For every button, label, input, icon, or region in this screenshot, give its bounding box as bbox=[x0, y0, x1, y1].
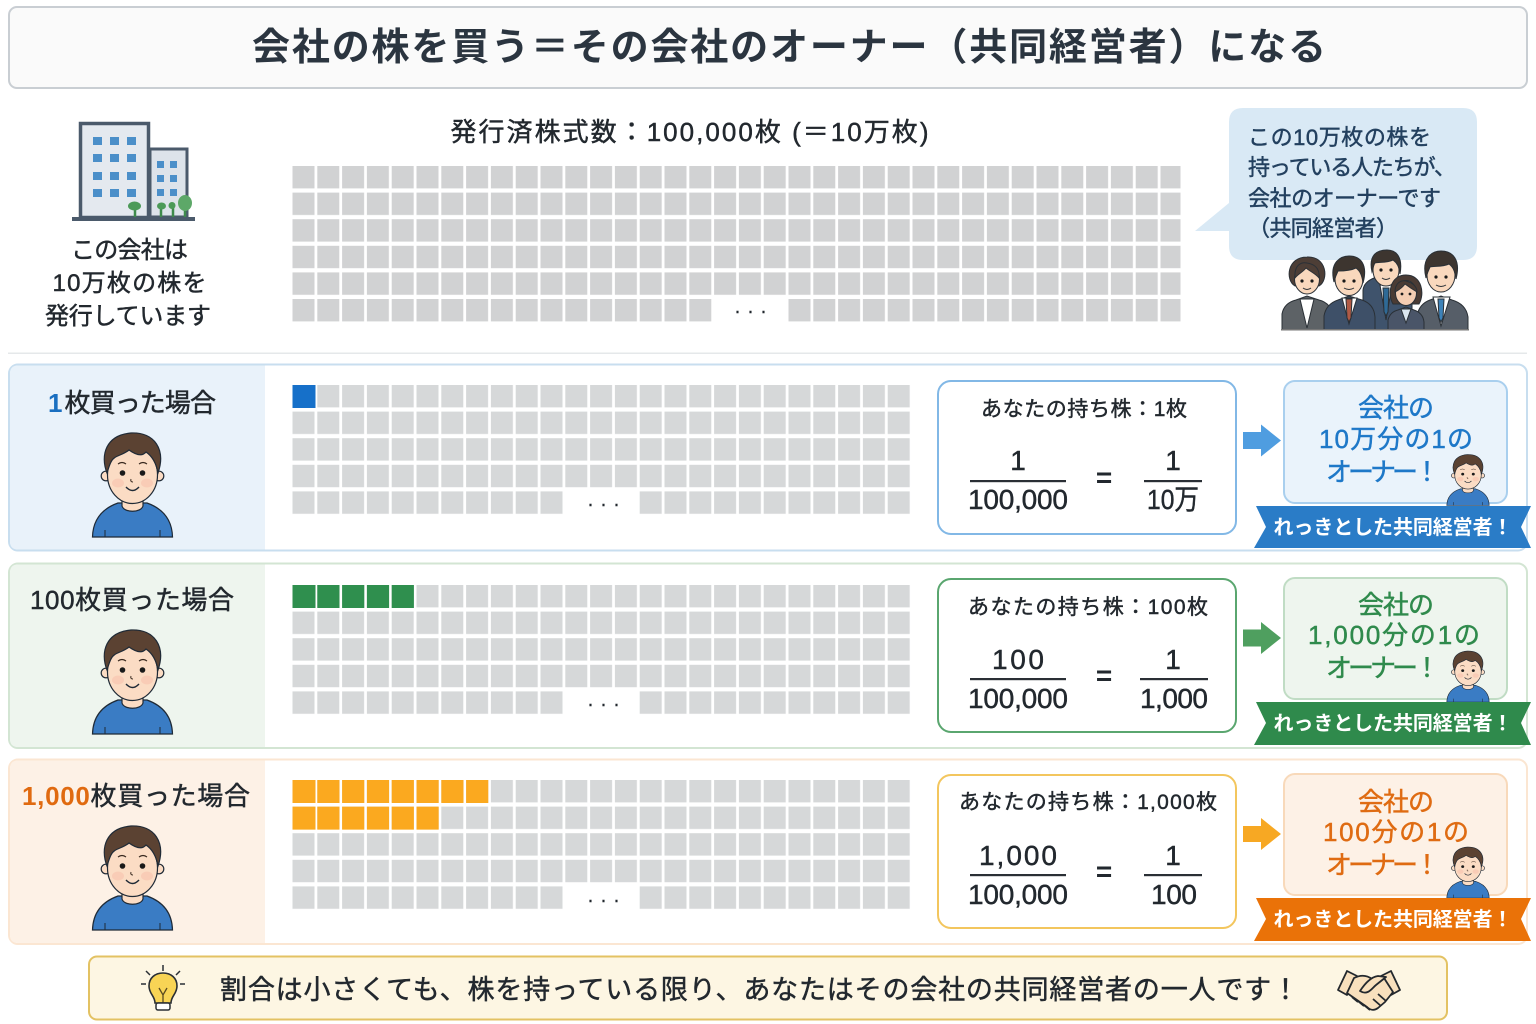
card: holdings fraction: あなたの持ち株：100枚 bbox=[968, 596, 1208, 619]
chart: 1 share of grid bbox=[292, 385, 912, 517]
chart: 1 share of grid: · · · bbox=[588, 494, 620, 514]
callout text: 会社のオーナーです bbox=[1248, 186, 1441, 211]
icon: group of co-owners bbox=[1281, 250, 1469, 330]
icon: office buildings bbox=[72, 124, 195, 221]
company description text bbox=[45, 237, 211, 330]
ribbon bbox=[1254, 898, 1531, 941]
panel: buying 100 shares bbox=[9, 564, 1531, 748]
ribbon bbox=[1254, 702, 1531, 745]
row background bbox=[9, 564, 1527, 748]
callout text: （共同経営者） bbox=[1248, 216, 1398, 241]
result: ownership callout: 会社の bbox=[1358, 590, 1434, 620]
card: holdings fraction: 1,000 bbox=[1140, 683, 1208, 714]
chart: share grid bbox=[292, 166, 1180, 325]
chart: 1,000 shares of grid bbox=[292, 780, 912, 912]
callout text bbox=[1248, 125, 1456, 241]
card: holdings fraction bbox=[938, 381, 1236, 534]
card: holdings fraction: 100 bbox=[992, 644, 1044, 675]
result: ownership callout: 100分の1の bbox=[1323, 817, 1469, 847]
ribbon bbox=[1254, 506, 1531, 548]
row background bbox=[9, 364, 1527, 550]
result: ownership callout: 会社の bbox=[1358, 393, 1434, 423]
panel: total issued shares bbox=[292, 117, 1180, 325]
heading: 100 shares: 100枚買った場合 bbox=[30, 585, 234, 615]
heading: 1 share: 1枚買った場合 bbox=[48, 388, 216, 418]
ribbon: れっきとした共同経営者！ bbox=[1274, 908, 1512, 931]
result: ownership callout: オーナー！ bbox=[1326, 457, 1440, 487]
icon: investor person bbox=[92, 433, 172, 537]
company description text: 発行しています bbox=[45, 303, 211, 330]
card: holdings fraction: 1 bbox=[1165, 840, 1181, 871]
ribbon: れっきとした共同経営者！ bbox=[1274, 712, 1512, 735]
chart: 100 shares of grid: · · · bbox=[588, 694, 620, 714]
callout: owners speech bubble bbox=[1195, 108, 1477, 260]
card: holdings fraction: = bbox=[1096, 856, 1112, 887]
arrow bbox=[1243, 622, 1281, 654]
card: holdings fraction: あなたの持ち株：1,000枚 bbox=[959, 791, 1217, 814]
result: ownership callout: オーナー！ bbox=[1326, 653, 1440, 683]
arrow bbox=[1243, 424, 1281, 456]
ribbon: れっきとした共同経営者！ bbox=[1274, 516, 1512, 539]
card: holdings fraction: 100,000 bbox=[968, 879, 1068, 910]
icon: small investor bbox=[1447, 847, 1489, 898]
icon: handshake bbox=[1338, 971, 1400, 1010]
icon: investor person bbox=[92, 826, 172, 930]
banner message: 割合は小さくても、株を持っている限り、あなたはその会社の共同経営者の一人です！ bbox=[220, 975, 1299, 1005]
company description text: この会社は bbox=[71, 237, 188, 264]
result: ownership callout: 1,000分の1の bbox=[1308, 620, 1480, 650]
company description text: 10万枚の株を bbox=[52, 270, 206, 297]
panel: buying 1,000 shares bbox=[9, 760, 1531, 944]
result: ownership callout: 10万分の1の bbox=[1319, 424, 1473, 454]
chart: 100 shares of grid bbox=[292, 585, 912, 717]
card: holdings fraction bbox=[938, 579, 1236, 732]
card: holdings fraction bbox=[938, 775, 1236, 928]
card: holdings fraction: = bbox=[1096, 462, 1112, 493]
result: ownership callout bbox=[1284, 774, 1507, 898]
card: holdings fraction: 10万 bbox=[1147, 484, 1199, 515]
icon: small investor bbox=[1447, 455, 1489, 506]
callout text: この10万枚の株を bbox=[1248, 125, 1431, 150]
callout text: 持っている人たちが、 bbox=[1248, 155, 1456, 180]
card: holdings fraction: = bbox=[1096, 660, 1112, 691]
result: ownership callout bbox=[1284, 578, 1507, 702]
result: ownership callout: 会社の bbox=[1358, 787, 1434, 817]
arrow bbox=[1243, 818, 1281, 850]
result: ownership callout: オーナー！ bbox=[1326, 850, 1440, 880]
heading: 1,000 shares: 1,000枚買った場合 bbox=[22, 781, 250, 811]
chart: share grid: · · · bbox=[735, 301, 767, 321]
heading: issued shares: 発行済株式数：100,000枚 (＝10万枚) bbox=[450, 117, 928, 147]
title text: 会社の株を買う＝その会社のオーナー（共同経営者）になる bbox=[252, 27, 1326, 69]
row background bbox=[9, 760, 1527, 944]
card: holdings fraction: あなたの持ち株：1枚 bbox=[981, 398, 1187, 421]
icon: light bulb bbox=[141, 965, 185, 1010]
panel: bottom message banner bbox=[89, 956, 1447, 1020]
card: holdings fraction: 1 bbox=[1010, 445, 1026, 476]
icon: small investor bbox=[1447, 651, 1489, 702]
card: holdings fraction: 1 bbox=[1165, 644, 1181, 675]
panel: company overview bbox=[45, 124, 211, 330]
card: holdings fraction: 100,000 bbox=[968, 484, 1068, 515]
icon: investor person bbox=[92, 630, 172, 734]
card: holdings fraction: 1 bbox=[1165, 445, 1181, 476]
panel: buying 1 share bbox=[9, 364, 1531, 550]
chart: 1,000 shares of grid: · · · bbox=[588, 890, 620, 910]
result: ownership callout bbox=[1284, 381, 1507, 506]
card: holdings fraction: 100 bbox=[1151, 879, 1197, 910]
card: holdings fraction: 1,000 bbox=[979, 840, 1057, 871]
section divider bbox=[8, 352, 1527, 354]
card: holdings fraction: 100,000 bbox=[968, 683, 1068, 714]
title banner bbox=[9, 7, 1527, 88]
